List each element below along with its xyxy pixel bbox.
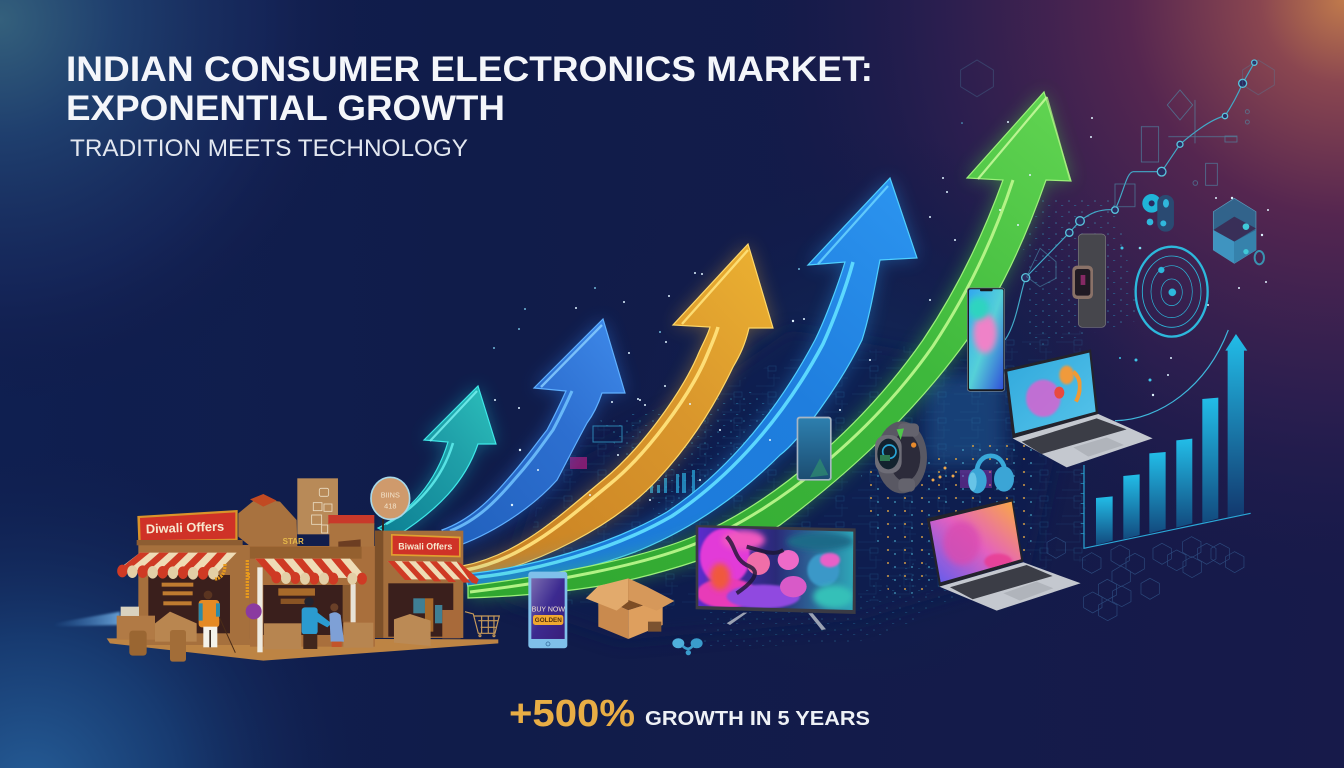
sign text: Biwali Offers: Biwali Offers xyxy=(398,541,452,551)
smartwatch xyxy=(875,421,927,493)
title: EXPONENTIAL GROWTH xyxy=(66,89,505,128)
sign text: Diwali Offers: Diwali Offers xyxy=(146,520,224,536)
left awning xyxy=(117,553,237,580)
store: Diwali Offers market stalls xyxy=(53,477,499,662)
growth stat callout: +500% xyxy=(509,693,635,735)
centre shop and carton tower xyxy=(238,478,375,652)
growth bar chart with arrow xyxy=(1081,330,1251,548)
left shop building xyxy=(137,510,250,645)
rising line graph xyxy=(1005,60,1257,340)
open delivery box xyxy=(586,578,674,639)
outline icons xyxy=(961,60,1274,287)
sparkle particles xyxy=(493,117,1269,506)
gray tablet band and fitness tracker xyxy=(1072,234,1106,327)
customers in blue xyxy=(302,597,344,649)
top phone with colorful screen xyxy=(967,288,1005,391)
arrow 3: gold xyxy=(462,244,773,580)
store platform xyxy=(107,638,498,661)
right shop xyxy=(375,531,463,638)
shopping cart xyxy=(465,612,499,637)
blue phone xyxy=(797,417,832,481)
small phone with Buy Now button xyxy=(528,572,567,648)
mini bar chart in circuit texture xyxy=(650,470,695,493)
centre awning xyxy=(255,559,367,585)
lower laptop xyxy=(927,498,1081,611)
growth stat callout xyxy=(509,693,870,735)
arrow 1: teal xyxy=(378,386,496,537)
circuit board texture behind the arrows xyxy=(500,200,1140,650)
title xyxy=(66,50,873,128)
isometric hexagon cube xyxy=(1213,198,1264,264)
headphones xyxy=(968,456,1014,493)
arrow 5: green xyxy=(468,92,1071,598)
title: INDIAN CONSUMER ELECTRONICS MARKET: xyxy=(66,50,873,89)
circular gadget icon xyxy=(1142,194,1174,232)
person in orange vest xyxy=(199,591,235,653)
radar rings xyxy=(1136,247,1208,337)
upper laptop xyxy=(1004,349,1153,467)
marigold garlands xyxy=(214,560,274,598)
arrow 4: bright blue xyxy=(465,178,917,587)
carton boxes on the platform xyxy=(117,607,431,662)
small phone with Buy Now button: GOLDEN xyxy=(535,617,562,624)
growth stat callout: GROWTH IN 5 YEARS xyxy=(645,708,870,730)
right awning xyxy=(388,561,479,584)
round sign: BIINS xyxy=(381,490,400,499)
motion streak left of store xyxy=(53,612,120,627)
arrow 2: blue xyxy=(442,319,625,548)
round sign: 418 xyxy=(384,502,396,511)
television xyxy=(696,525,856,630)
centre shop and carton tower: STAR xyxy=(283,537,304,546)
earbuds xyxy=(672,638,703,655)
hexagon mesh under the chart xyxy=(1047,537,1244,621)
subtitle: TRADITION MEETS TECHNOLOGY xyxy=(70,135,468,162)
round sign xyxy=(371,477,410,531)
small phone with Buy Now button: BUY NOW xyxy=(532,607,565,614)
tech backdrop: line graph, icons and radar xyxy=(961,60,1274,391)
